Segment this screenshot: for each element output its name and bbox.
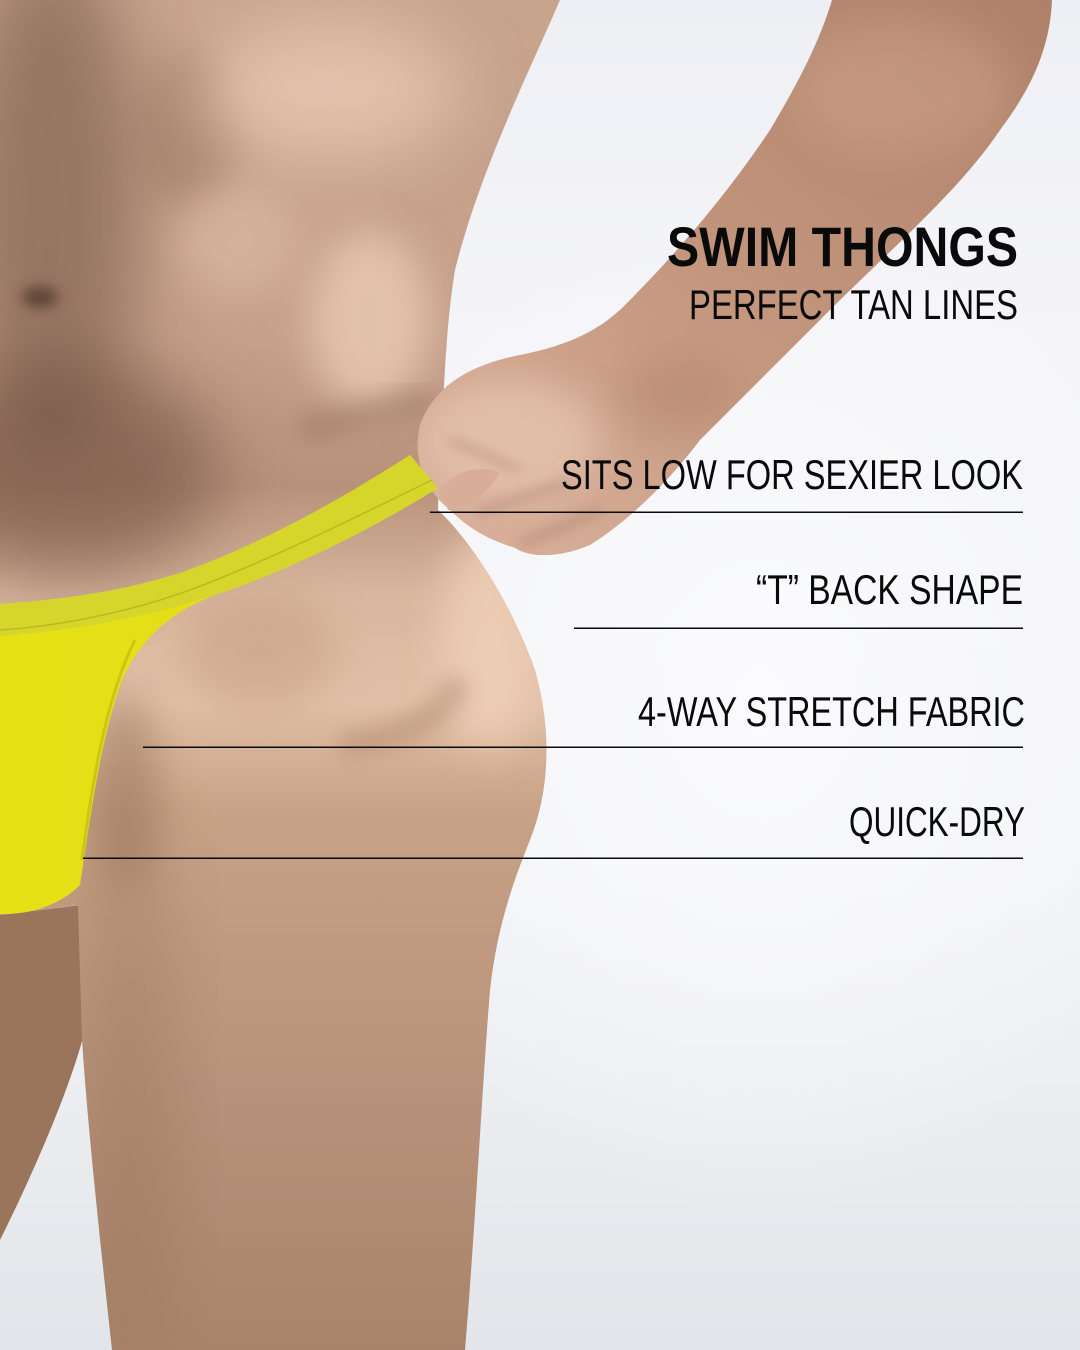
model: back leg [0,905,85,1240]
feature: quick-dry: QUICK-DRY [849,798,1025,845]
model: torso and front leg [0,0,570,1350]
garment: yellow swim thong [0,455,438,914]
title: SWIM THONGS [667,215,1018,278]
feature: T back: “T” BACK SHAPE [756,566,1023,613]
model: arm and hand [400,0,1080,570]
fingers over waistband [440,469,500,510]
